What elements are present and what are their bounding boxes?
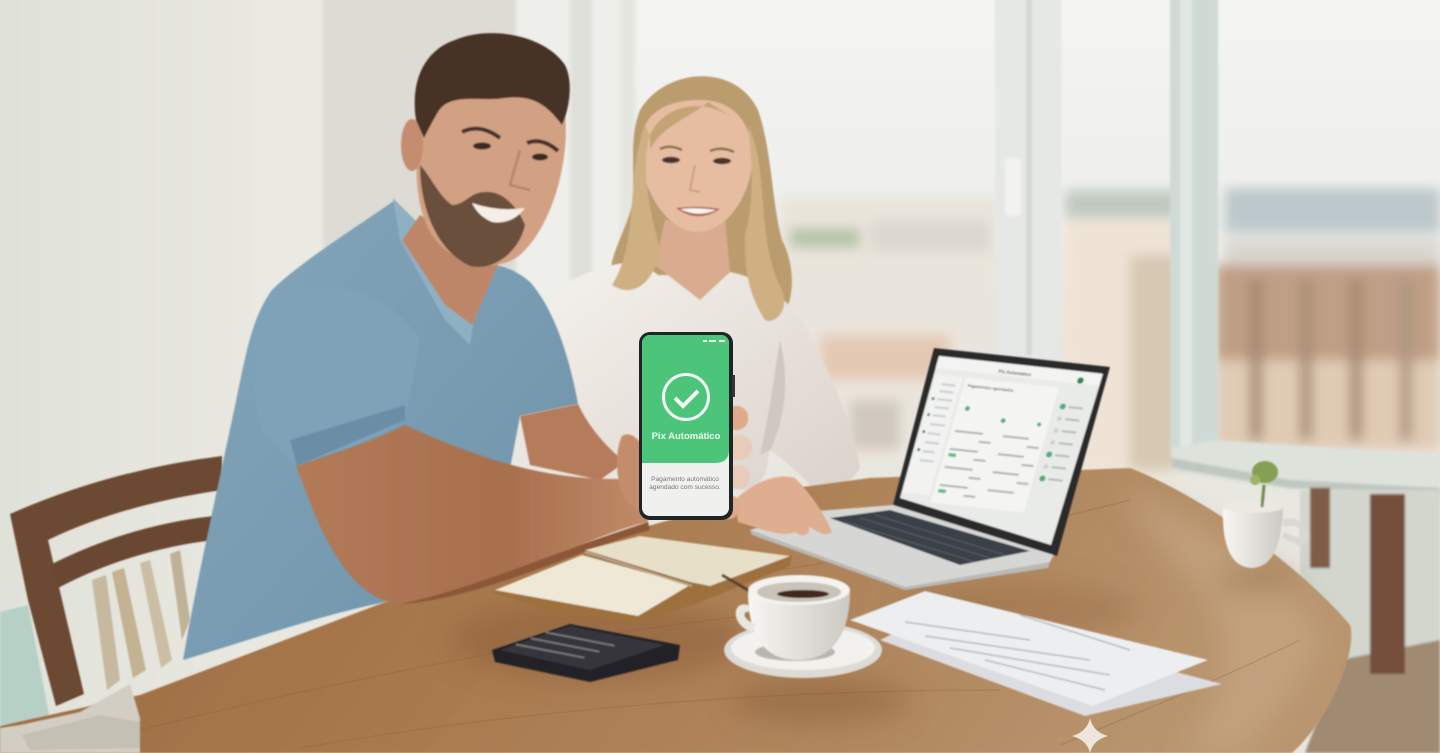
fingers — [716, 406, 752, 519]
outside floor and post — [1300, 488, 1440, 753]
printed papers — [850, 591, 1222, 716]
table wood grain — [140, 500, 1300, 748]
notebook — [492, 536, 792, 624]
man polo shirt — [183, 200, 578, 660]
phone screen — [642, 335, 729, 516]
woman neck and face — [640, 100, 752, 300]
phone message: agendado com sucesso. — [649, 484, 721, 491]
laptop base — [750, 505, 1055, 587]
woman blouse — [548, 262, 860, 491]
laptop — [750, 348, 1110, 590]
phone title: Pix Automático — [652, 431, 721, 442]
wooden chair — [0, 456, 222, 725]
man hair — [415, 33, 570, 138]
coffee cup and saucer — [724, 575, 882, 678]
man's right arm reaching to phone — [296, 404, 650, 604]
man neck and face — [401, 33, 570, 325]
phone body — [639, 332, 733, 520]
tissue box — [0, 684, 140, 753]
window frames — [995, 0, 1440, 495]
plant in white cup — [1223, 461, 1308, 568]
phone message — [649, 476, 721, 491]
woman eyes and smile — [662, 157, 680, 163]
watermark sparkle — [1072, 718, 1108, 753]
man — [183, 33, 578, 660]
laptop main panel — [931, 377, 1059, 512]
laptop app header: Pix Automático — [998, 369, 1032, 377]
man beard — [420, 165, 525, 267]
phone message: Pagamento automático — [651, 476, 719, 483]
laptop sidebar — [903, 374, 963, 495]
woman hair front strands — [612, 125, 660, 290]
woman's hand on laptop — [735, 477, 832, 535]
calculator — [492, 624, 680, 682]
man sleeve and collar — [253, 286, 420, 466]
man eyes and brows — [473, 142, 491, 150]
icon: check circle — [664, 374, 708, 420]
laptop keyboard — [830, 510, 1030, 565]
woman blouse shadow folds — [760, 340, 785, 455]
table top — [0, 468, 1351, 753]
blurred city view — [780, 188, 1440, 470]
laptop main panel: Pagamentos agendados — [967, 383, 1015, 393]
hand behind phone — [617, 434, 653, 520]
laptop lid bezel — [893, 348, 1110, 556]
woman hair back — [611, 76, 792, 325]
laptop screen — [899, 356, 1103, 545]
table reflections and shadows — [450, 490, 1320, 753]
phone status bar — [703, 340, 725, 342]
woman — [548, 76, 860, 491]
phone held in hand — [617, 332, 752, 520]
laptop app header — [936, 356, 1102, 386]
laptop right list — [1039, 403, 1084, 484]
